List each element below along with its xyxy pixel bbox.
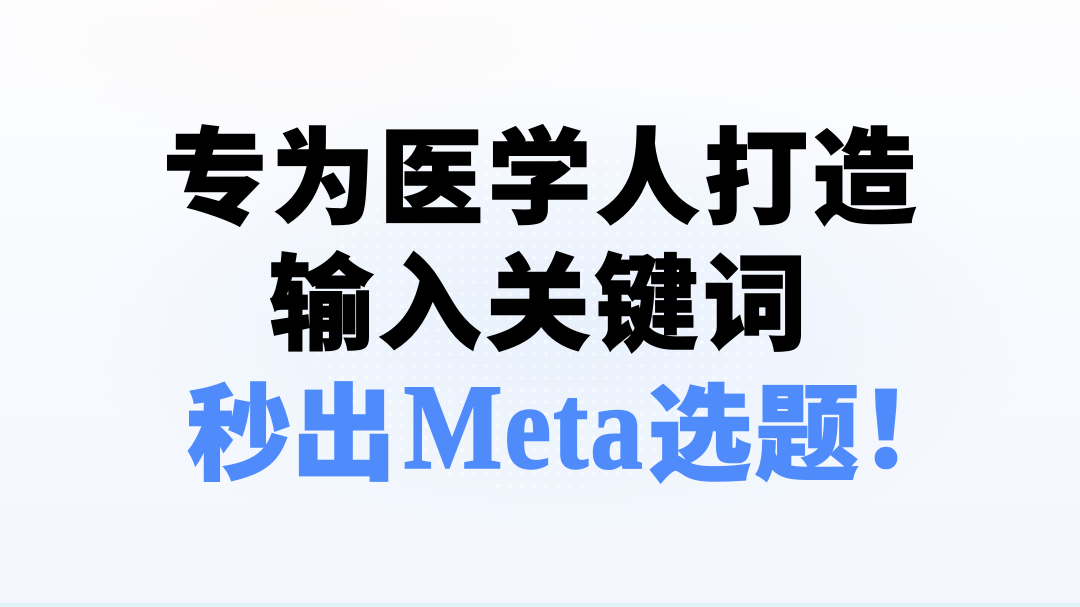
highlighted blue title line 3: 选题 [648, 378, 862, 494]
highlighted blue title line 3: ！ [860, 374, 964, 490]
highlighted blue title line 3: Meta [404, 361, 645, 494]
title line 2: 输入关键词 [269, 248, 812, 364]
highlighted blue title line 3: 秒出 [187, 378, 397, 494]
title line 1: 专为医学人打造 [163, 122, 920, 238]
